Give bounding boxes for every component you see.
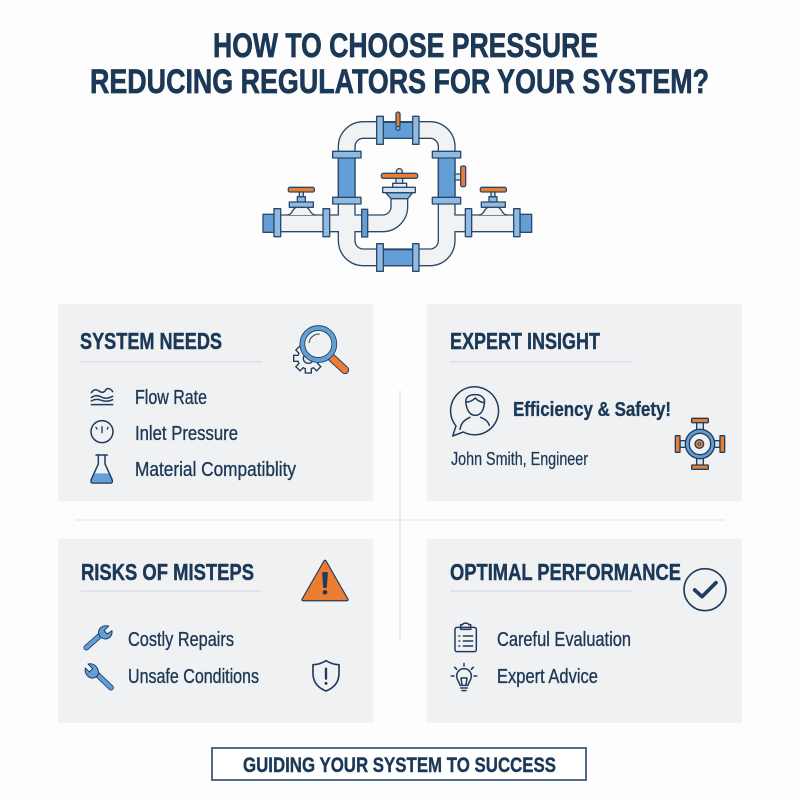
footer banner — [212, 748, 586, 780]
attribution: John Smith, Engineer — [451, 449, 588, 469]
valve: center — [381, 169, 418, 199]
heading: optimal performance: OPTIMAL PERFORMANCE — [450, 559, 681, 585]
icon: warning triangle — [303, 561, 347, 600]
list item: costly repairs — [86, 626, 234, 651]
flanges — [274, 116, 520, 271]
title — [90, 27, 709, 101]
heading: expert insight: EXPERT INSIGHT — [450, 328, 600, 354]
blue sections — [263, 122, 532, 266]
icon: pressure gauge — [91, 421, 113, 443]
icon: spanner — [85, 664, 111, 688]
title: HOW TO CHOOSE PRESSURE — [213, 27, 598, 65]
heading: system needs: SYSTEM NEEDS — [80, 328, 222, 354]
panel: optimal performance — [427, 539, 742, 723]
icon: waves — [91, 389, 113, 405]
list item: material compatibility — [91, 455, 296, 483]
list item: unsafe conditions — [85, 664, 259, 688]
list item: flow rate — [91, 387, 207, 409]
valve: right — [479, 187, 507, 215]
icon: engineer speech bubble — [451, 387, 499, 436]
list item: expert advice — [451, 663, 598, 691]
list item: flow rate: Flow Rate — [135, 387, 207, 409]
icon: check circle — [684, 569, 726, 611]
list item: inlet pressure — [91, 421, 238, 445]
icon: clipboard — [455, 623, 476, 652]
list item: costly repairs: Costly Repairs — [128, 629, 234, 651]
icon: valve top view — [675, 418, 725, 469]
valve: right side handle — [455, 166, 466, 187]
pipe system illustration — [263, 112, 532, 271]
valve: top gauge — [396, 112, 400, 130]
panel: expert insight — [427, 304, 742, 501]
panel: system needs — [58, 304, 373, 501]
valve: left — [287, 187, 316, 215]
icon: light bulb — [451, 663, 477, 691]
quadrant dividers — [75, 390, 725, 640]
footer banner: GUIDING YOUR SYSTEM TO SUCCESS — [243, 754, 556, 777]
list item: expert advice: Expert Advice — [497, 666, 598, 688]
icon: warning shield — [313, 661, 339, 691]
list item: unsafe conditions: Unsafe Conditions — [128, 666, 259, 688]
quote: Efficiency & Safety! — [513, 399, 671, 421]
list item: inlet pressure: Inlet Pressure — [135, 423, 238, 445]
icon: wrench — [86, 626, 112, 648]
heading: risks of missteps: RISKS OF MISTEPS — [81, 559, 254, 585]
panel: risks of missteps — [58, 539, 373, 723]
icon: magnifier and gear — [294, 328, 345, 373]
list item: material compatibility: Material Compatiblity — [135, 459, 296, 481]
list item: careful evaluation — [455, 623, 631, 652]
list item: careful evaluation: Careful Evaluation — [497, 629, 631, 651]
icon: flask — [91, 455, 112, 483]
